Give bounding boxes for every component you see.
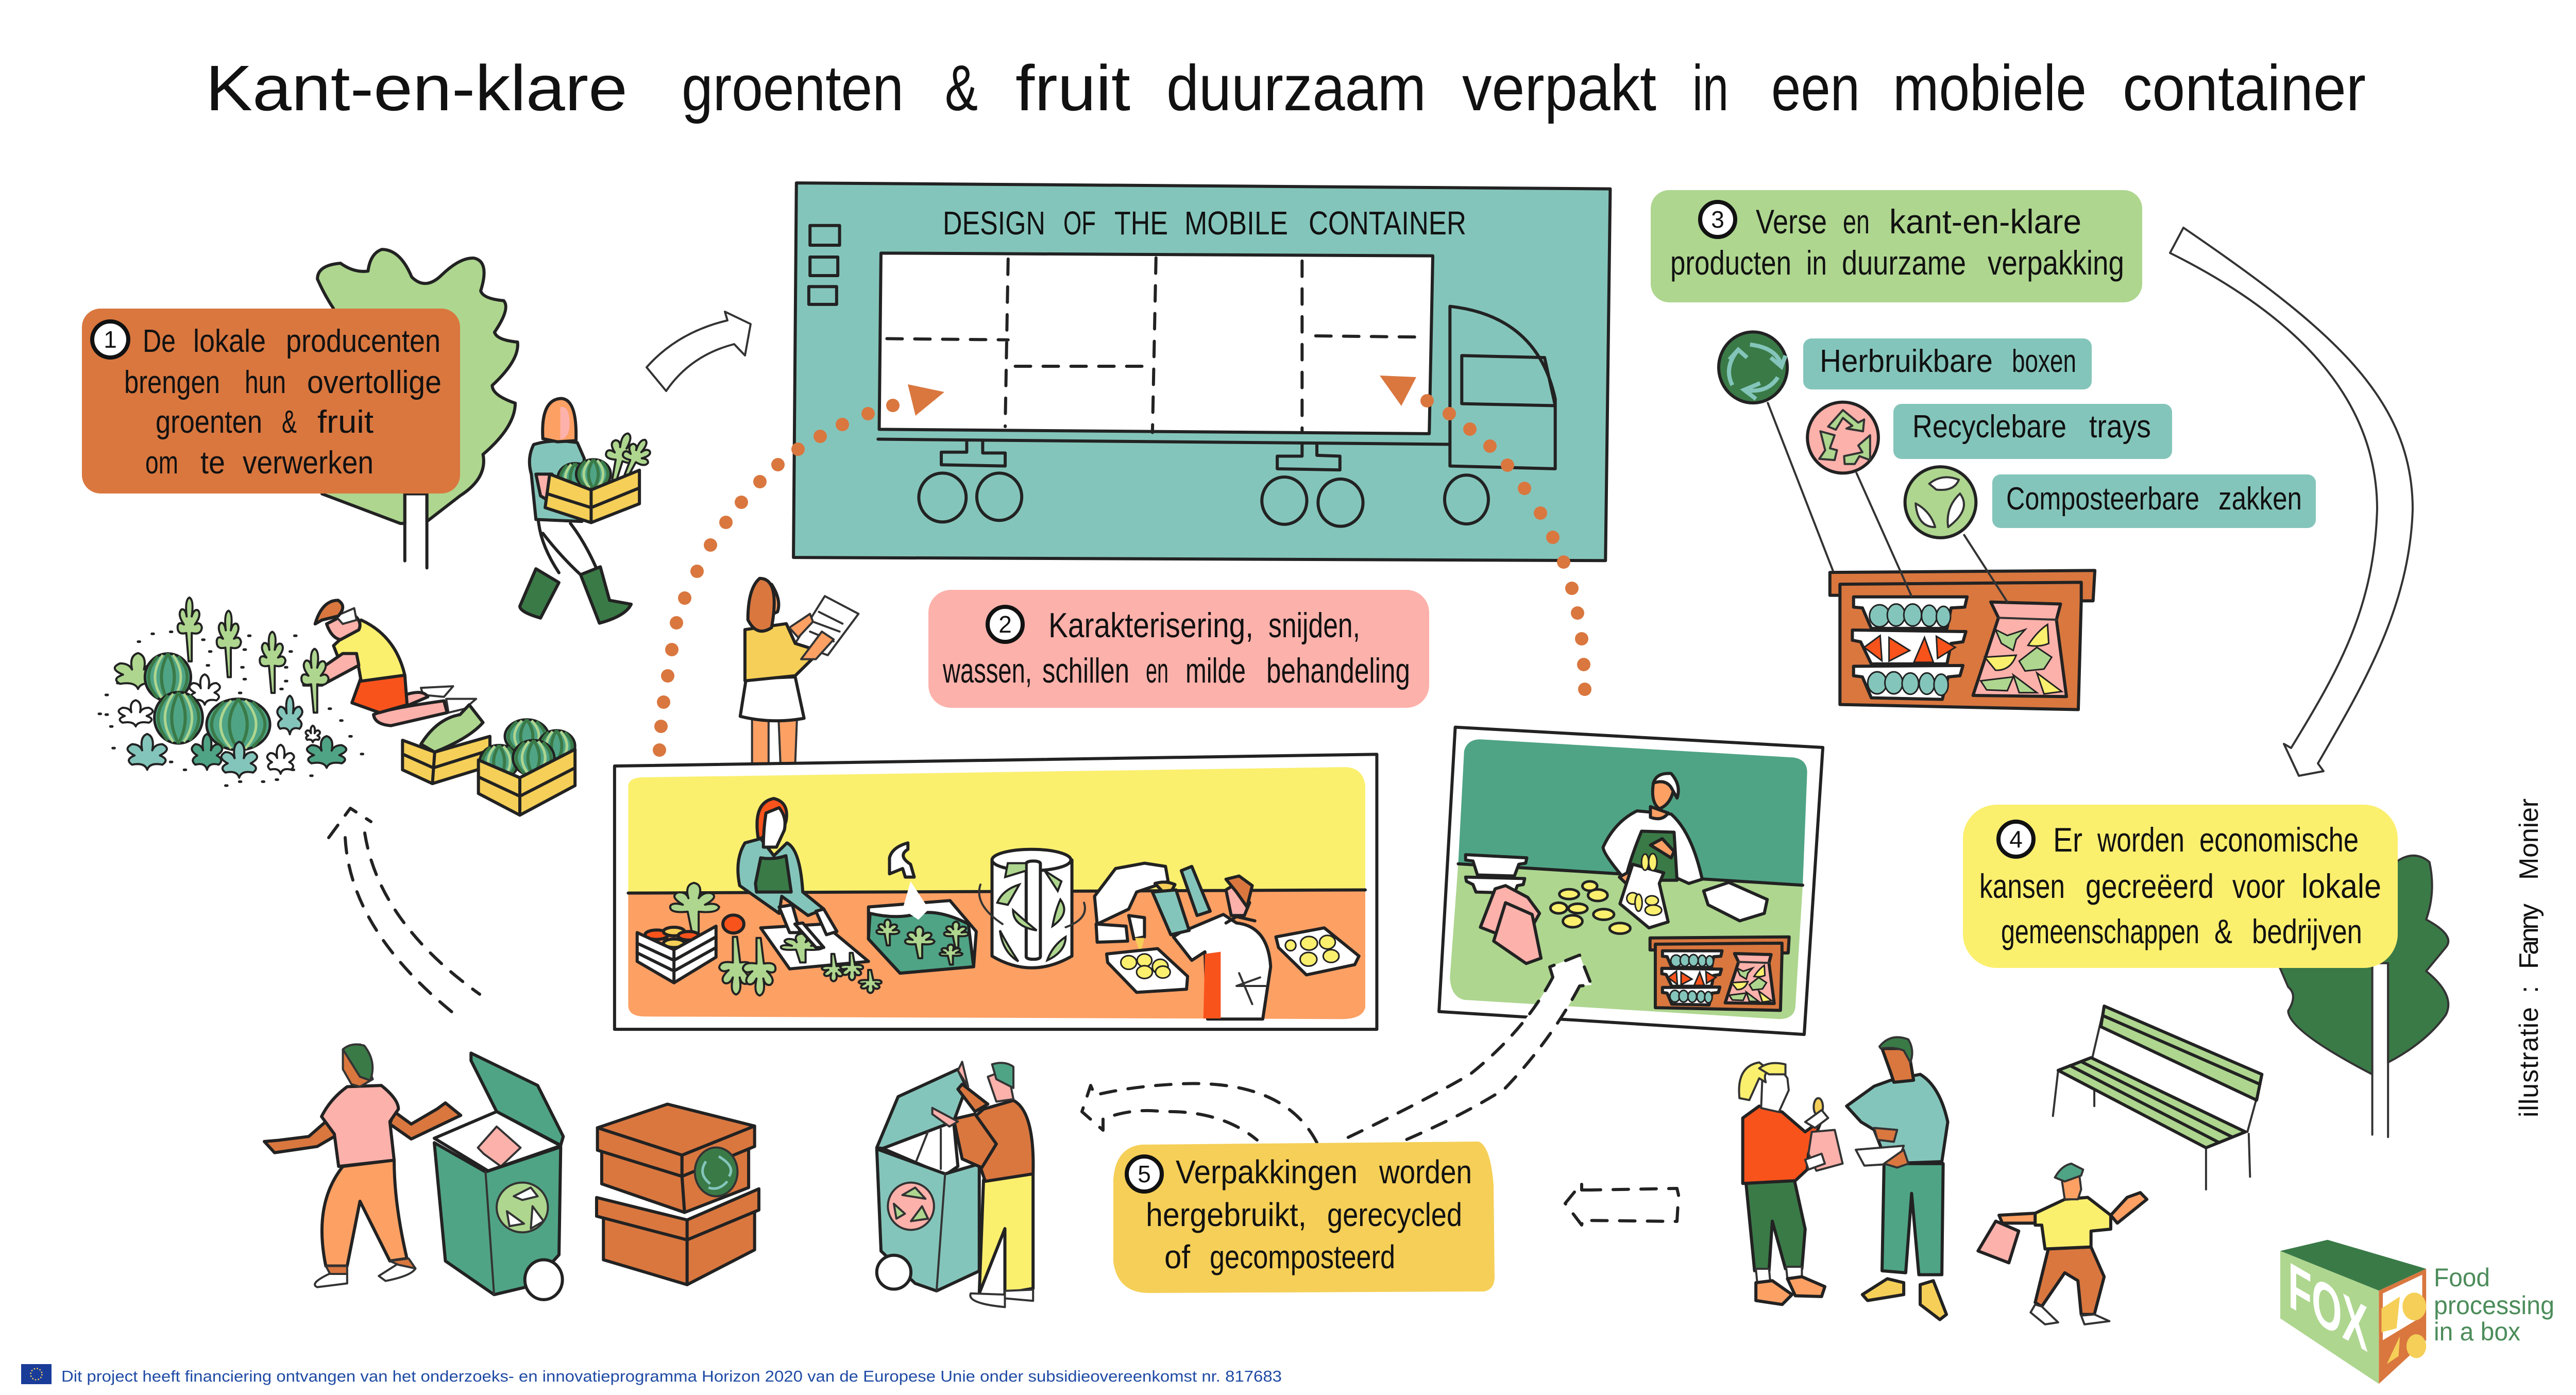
crate with lettuce [402,705,490,784]
crate with vegetables [637,883,744,983]
title: Kant-en-klare [206,53,628,124]
title: fruit [1015,53,1130,124]
step 4 callout: kansen [1979,867,2065,905]
badge 3: 3 [1711,206,1724,233]
step 4 callout: lokale [2301,867,2381,905]
logo text: processing [2434,1291,2554,1320]
container heading: OF [1063,205,1096,242]
step 5 callout: hergebruikt, [1146,1196,1307,1233]
teal bin [877,1069,979,1291]
step 4 tree [2280,856,2448,1137]
logo text: in a box [2434,1317,2520,1346]
packaging legend labels: Herbruikbare [1820,344,1993,379]
title: duurzaam [1166,53,1426,124]
yellow fruit pieces [1550,881,1630,933]
step 5 callout: of [1164,1238,1190,1275]
container heading: MOBILE [1184,205,1288,242]
icon: compostable [1905,467,1976,538]
badge 1: 1 [104,326,117,353]
title: in [1692,53,1728,124]
illustrator credit: Monier [2514,798,2544,880]
process panel [615,754,1377,1029]
packaging icons and product box [1719,332,2095,710]
step 4 callout: economische [2199,821,2359,859]
step 2 callout [928,590,1429,708]
leader lines [1768,403,2007,602]
packaging legend labels: zakken [2218,481,2302,517]
step 3 callout: duurzame [1842,244,1966,282]
illustrator credit: : [2514,986,2544,993]
truck chassis and wheels [878,307,1555,526]
green bin [434,1053,563,1300]
person at teal bin [933,1062,1033,1307]
step 1 callout: lokale [193,324,266,359]
step 3 callout: kant-en-klare [1889,202,2081,241]
woman consumer [1739,1062,1843,1304]
product box in panel [1650,937,1789,1010]
step 1 callout: verwerken [243,445,374,481]
step 5 callout: worden [1379,1153,1472,1190]
packaging legend labels: Composteerbare [2006,481,2199,517]
salad spinner [979,849,1085,968]
field with melons and plants [99,598,363,786]
funding statement: Dit project heeft financiering ontvangen van het onderzoeks- en innovatieprogramma Horizon 2020 van de Europese Unie onder subsidieovereenkomst nr. 817683 [61,1367,1282,1385]
title: een [1771,53,1860,124]
badge 1 [92,321,128,358]
trays with yellow pieces [1107,928,1359,992]
legend squares [809,226,840,304]
icon: reusable [1719,332,1787,403]
title: mobiele [1893,53,2087,124]
big curved arrow [2170,228,2413,776]
step 2 callout: schillen [1042,651,1129,690]
title: verpakt [1462,53,1656,124]
step 2 callout: wassen, [942,651,1032,690]
packing panel [1439,727,1823,1034]
step 3 callout: verpakking [1988,244,2124,282]
step 4 callout [1963,805,2398,968]
step 2 callout: behandeling [1266,651,1410,690]
dotted flow arrows [653,376,1591,757]
loose leaves on table [719,937,882,996]
bottom scene: bins and boxes [264,1044,1033,1307]
step 1 callout: hun [245,365,286,400]
stacked trays and bags [1466,855,1541,963]
step 1 callout [82,309,460,494]
bench [2053,1006,2262,1189]
step 3 callout: en [1843,202,1870,241]
step 1 callout: brengen [124,365,220,400]
step 5 callout: gerecycled [1327,1196,1462,1233]
illustration: farm scene [99,249,658,815]
container floor plan [879,253,1433,434]
illustrator credit [2514,798,2544,1117]
badge 4 [1998,822,2033,857]
woman carrying crate [520,398,658,623]
step 4 callout: & [2214,912,2232,950]
illustrator credit: illustratie [2514,1007,2544,1117]
step 1 callout: fruit [317,404,374,440]
worker filling bag [1603,773,1702,928]
step 5 callout: Verpakkingen [1176,1153,1358,1190]
illustrator credit: Fanny [2514,904,2544,969]
step 3 callout: Verse [1756,202,1827,241]
badge 2 [988,607,1023,642]
badge 5 [1127,1156,1162,1192]
badge 2: 2 [998,611,1012,638]
step 4 callout: voor [2232,867,2285,905]
step 1 callout: producenten [286,324,440,359]
container heading: THE [1114,205,1168,242]
step 1 callout: overtollige [307,365,442,400]
step 1 callout: & [282,404,297,440]
peeling machine and worker [1094,863,1270,1019]
badge 5: 5 [1138,1161,1151,1187]
packaging legend labels: boxen [2012,344,2076,379]
man consumer [1846,1037,1948,1320]
dashed arrow from consumers [1565,1183,1679,1225]
container heading: CONTAINER [1309,205,1466,242]
step 1 callout: om [145,445,178,481]
logo box [2280,1240,2426,1384]
badge 3 [1700,202,1735,237]
step 5 callout: gecomposteerd [1210,1238,1395,1275]
person throwing bag [264,1044,461,1287]
step 3 callout [1651,190,2142,302]
step 4 callout: worden [2097,821,2184,859]
child with bag [1978,1164,2147,1324]
title: & [945,53,978,124]
step 2 callout: en [1146,651,1168,690]
packaging legend labels: trays [2089,409,2151,445]
title: groenten [682,53,904,124]
wash basin with tap [869,843,976,973]
step 4 callout: gecreëerd [2086,867,2214,905]
arrow: farm to container [647,312,751,391]
step 2 callout: snijden, [1268,606,1360,645]
step 4 callout: Er [2053,821,2082,859]
step 5 callout [1113,1142,1495,1293]
step 1 callout: De [143,324,176,359]
dashed arrow to packing panel [1343,955,1591,1142]
step 2 callout: milde [1185,651,1246,690]
packaging legend labels: Recyclebare [1912,409,2066,445]
farmer kneeling [301,600,476,726]
EU flag [21,1364,52,1384]
consumers, bench and logo scene [1739,1006,2426,1384]
title: container [2123,53,2366,124]
step 1 callout: te [200,445,225,481]
worker cutting vegetables [738,798,869,969]
empty tray [1704,882,1767,921]
icon: recyclable [1807,402,1878,473]
woman with clipboard [740,579,858,763]
dashed arrow to bins [1082,1083,1317,1143]
container heading: DESIGN [943,205,1045,242]
tree [317,249,518,568]
dashed arrow up to farm [329,808,480,1018]
step 3 callout: producten [1670,244,1791,282]
badge 4: 4 [2009,826,2023,853]
step 2 callout: Karakterisering, [1048,606,1253,645]
step 1 callout: groenten [156,404,262,440]
stacked orange boxes [597,1104,759,1285]
logo text: Food [2434,1263,2490,1292]
container design panel [793,183,1610,560]
logo wordmark on box: FOX [2288,1248,2368,1366]
crate with melons [479,720,575,815]
logo text [2434,1263,2554,1346]
packaging legend labels [1803,338,2316,528]
step 4 callout: gemeenschappen [2001,912,2199,950]
step 4 callout: bedrijven [2252,912,2362,950]
step 3 callout: in [1806,244,1827,282]
